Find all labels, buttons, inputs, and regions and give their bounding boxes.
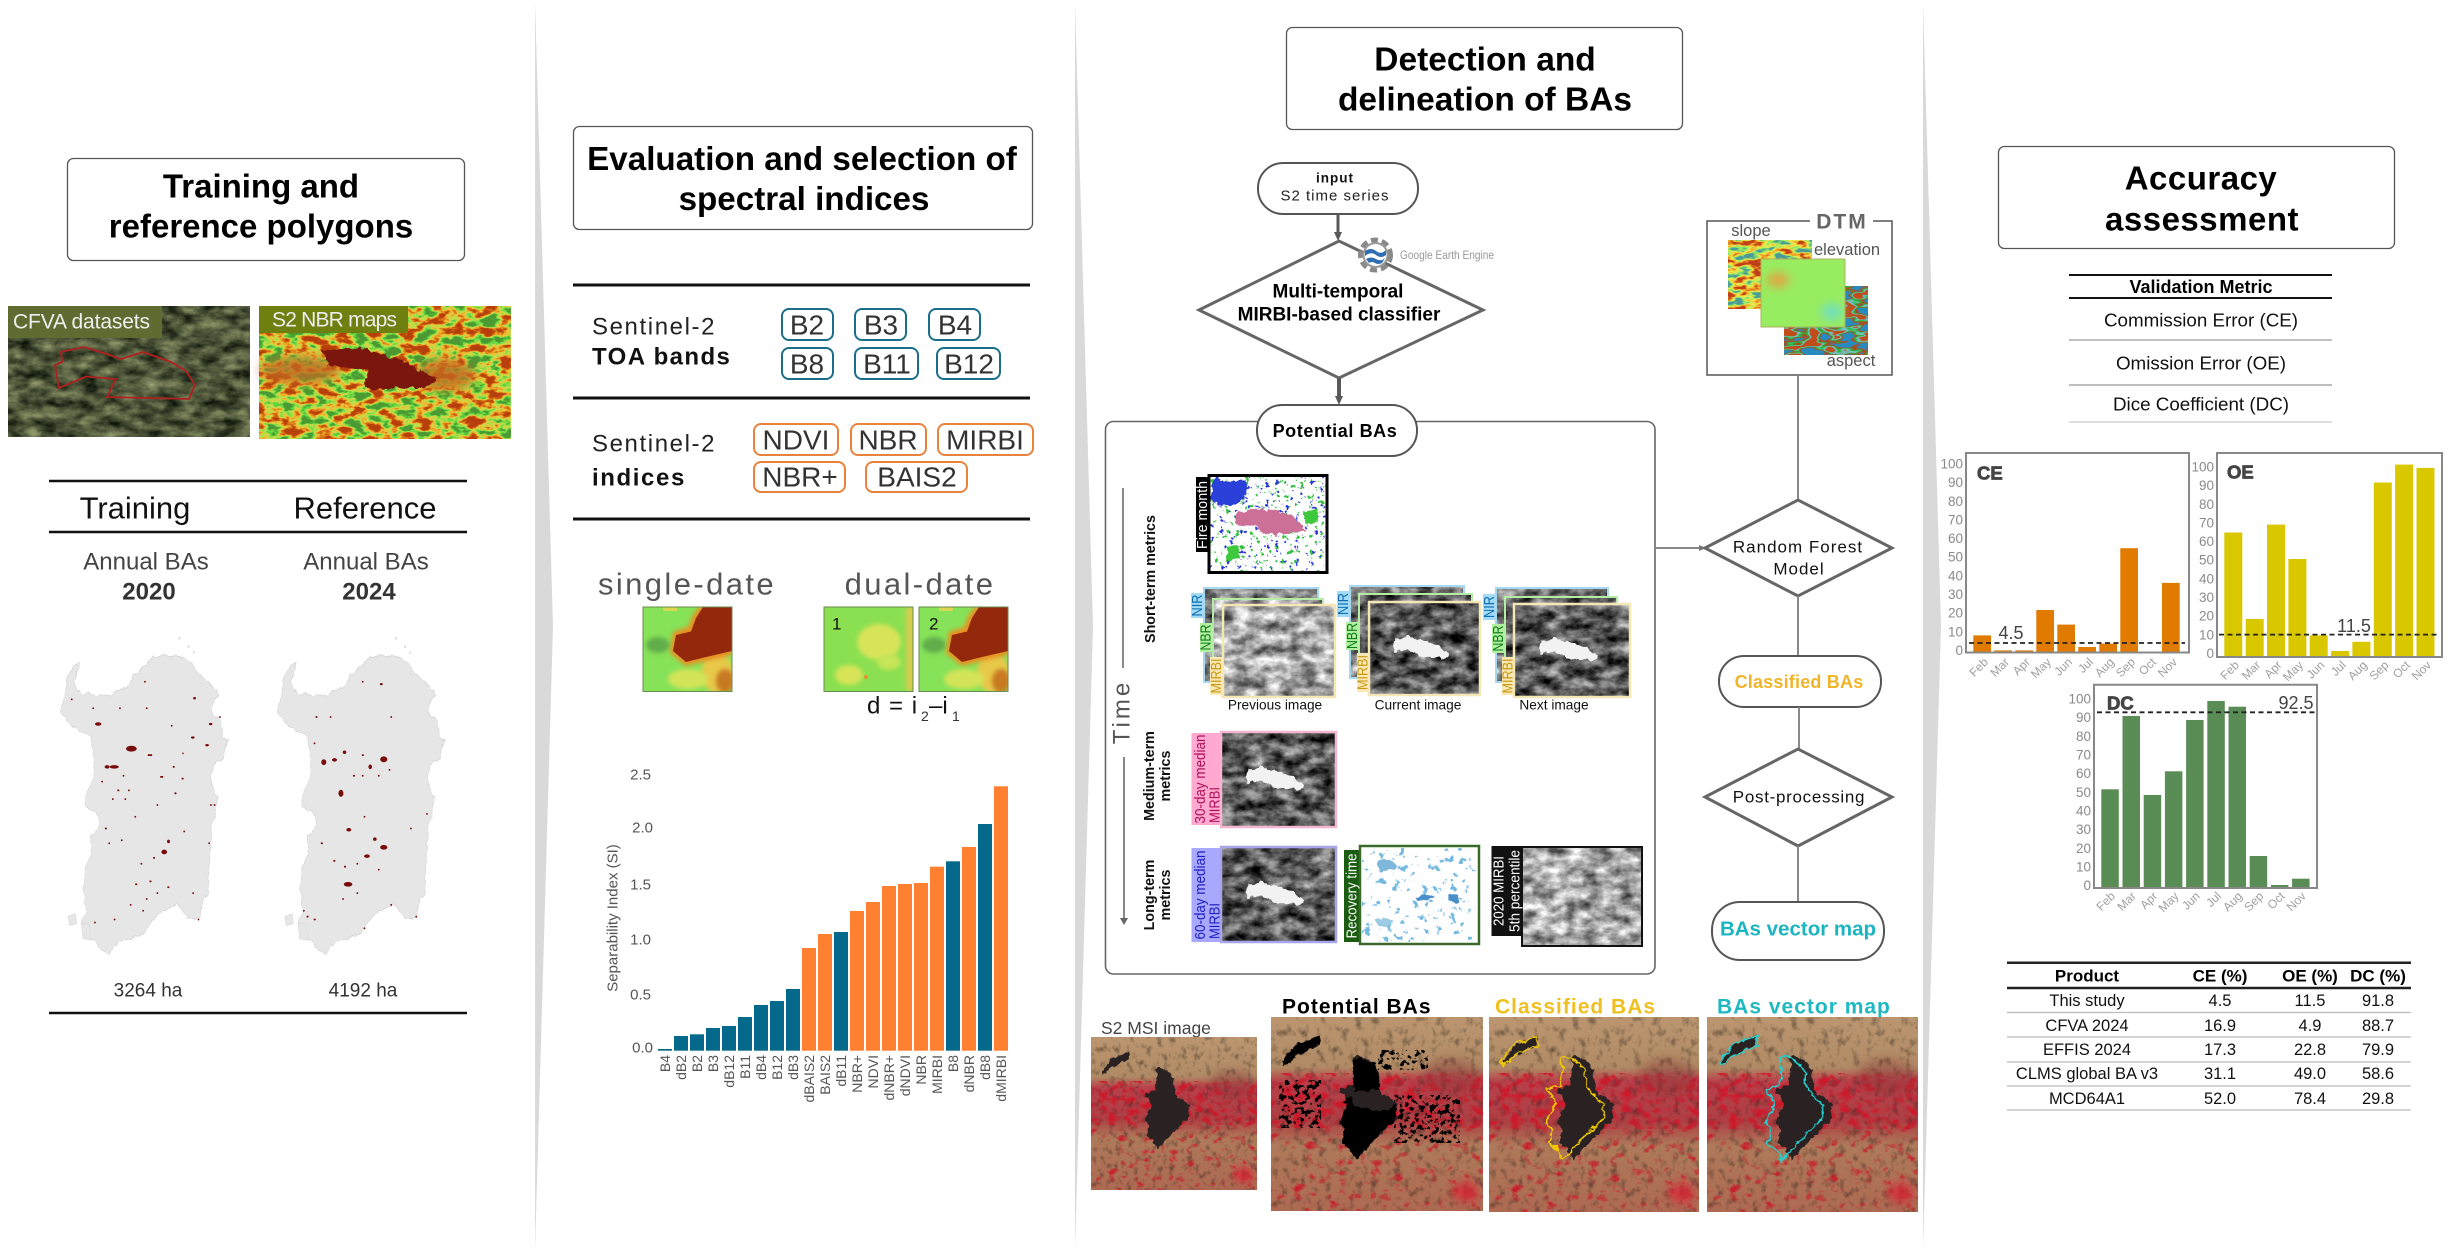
bar chart: OE: Jun [2304, 658, 2327, 682]
bar chart: DC: 100 [2068, 692, 2091, 706]
bar chart: CE: 50 [1948, 550, 1963, 565]
bar chart: OE: 60 [2199, 534, 2214, 549]
flow: BAs vector map [1712, 902, 1884, 960]
image stack: previous image: MIRBI [1208, 658, 1225, 694]
dual-date example: 1 [832, 614, 841, 634]
table: product comparison: Product [2055, 966, 2119, 986]
chips: spectral indices: MIRBI [946, 424, 1024, 456]
DTM inputs: slope [1731, 222, 1771, 240]
table: product comparison: OE (%) [2282, 966, 2338, 986]
image: 2020 MIRBI 5th percentile: 2020 MIRBI [1490, 856, 1508, 926]
image: fire month [1194, 476, 1327, 573]
image stack: next image: MIRBI [1500, 658, 1516, 694]
bar chart: separability index: dB3 [785, 1055, 801, 1080]
table: product comparison: 11.5 [2295, 992, 2325, 1010]
bar chart: CE: 80 [1948, 494, 1963, 509]
image: 30-day median MIRBI: 30-day median [1192, 734, 1209, 824]
arrow: time axis [1108, 488, 1136, 925]
bar chart: DC: Jul [2203, 889, 2224, 910]
decision: random forest model [1705, 500, 1892, 596]
bar chart: OE: 100 [2191, 460, 2214, 474]
table: product comparison: 49.0 [2294, 1065, 2326, 1083]
bar chart: DC: 70 [2076, 748, 2091, 762]
image: S2 NBR maps [259, 306, 511, 439]
heading: training and reference polygons [68, 158, 464, 260]
table: training and reference columns: 2020 [122, 578, 176, 606]
image: S2 MSI image [1091, 1018, 1257, 1190]
arrow: time axis: Time [1108, 680, 1136, 744]
dual-date example: d = i [867, 692, 918, 720]
text: Sentinel-2 TOA bands: TOA bands [592, 344, 731, 370]
DTM inputs: elevation [1814, 241, 1880, 259]
bar chart: DC: Jun [2179, 889, 2203, 913]
table: product comparison: 78.4 [2294, 1090, 2326, 1108]
bar chart: separability index: MIRBI [929, 1055, 945, 1094]
row labels: metric scales [1142, 515, 1174, 930]
arrow: model to classified BAs [1797, 596, 1799, 656]
chips: spectral indices: NBR [858, 424, 918, 456]
flow: classified BAs [1719, 656, 1881, 707]
decision: multi-temporal MIRBI-based classifier: MIRBI-based classifier [1238, 304, 1441, 326]
flow: potential BAs: Potential BAs [1273, 421, 1397, 441]
heading: detection and delineation: delineation of BAs [1338, 82, 1632, 118]
bar chart: CE: 0 [1955, 643, 1963, 658]
row labels: metric scales: metrics [1158, 870, 1174, 920]
bar chart: DC: 60 [2076, 766, 2091, 781]
heading: accuracy assessment [1998, 146, 2394, 248]
bar chart: separability index: B4 [657, 1055, 673, 1072]
bar chart: OE: Apr [2262, 658, 2285, 681]
bar chart: DC: 40 [2076, 804, 2091, 818]
image: CFVA datasets [8, 306, 250, 437]
icon: Google Earth Engine [1360, 240, 1494, 270]
bar chart: OE: Nov [2409, 658, 2434, 683]
table: product comparison: DC (%) [2350, 966, 2406, 986]
bar chart: CE: 20 [1948, 606, 1963, 621]
image stack: previous image: Previous image [1228, 698, 1322, 712]
image: 30-day median MIRBI [1192, 732, 1336, 827]
table: product comparison: EFFIS 2024 [2043, 1041, 2131, 1059]
bar chart: separability index: B11 [737, 1055, 753, 1079]
image stack: current image: NIR [1335, 593, 1352, 615]
table: training and reference columns: Training [80, 490, 190, 526]
bar chart: OE [2191, 453, 2442, 684]
table: validation metrics: Omission Error (OE) [2116, 352, 2286, 374]
text: Sentinel-2 indices: Sentinel-2 [592, 430, 716, 458]
arrow: DTM to random forest [1797, 375, 1799, 500]
image: classified BAs result: Classified BAs [1495, 996, 1656, 1018]
map: annual burned areas 2020 [61, 638, 228, 955]
chips: spectral bands [782, 309, 1000, 380]
table: product comparison: 16.9 [2204, 1017, 2236, 1035]
table: product comparison: 52.0 [2204, 1090, 2236, 1108]
table: training and reference columns: Annual BAs [83, 548, 209, 576]
image: S2 MSI image: S2 MSI image [1101, 1018, 1211, 1038]
chips: spectral bands: B11 [863, 348, 911, 380]
bar chart: CE: Nov [2155, 655, 2180, 680]
chips: spectral indices: NDVI [763, 424, 829, 456]
image: potential BAs result [1271, 996, 1483, 1211]
bar chart: DC: Sep [2241, 889, 2267, 914]
table: product comparison: 58.6 [2362, 1065, 2394, 1083]
bar chart: CE: Mar [1987, 655, 2012, 680]
bar chart: separability index: NDVI [865, 1055, 881, 1088]
bar chart: DC: 80 [2076, 729, 2091, 744]
bar chart: separability index: dNDVI [897, 1055, 913, 1096]
bar chart: DC: Nov [2284, 889, 2309, 914]
flow: input S2 time series [1258, 163, 1418, 214]
bar chart: separability index [604, 766, 1009, 1102]
bar chart: CE: Oct [2136, 655, 2159, 678]
table: product comparison: 4.9 [2299, 1017, 2321, 1035]
table: product comparison: CE (%) [2193, 966, 2247, 986]
image: fire month: Fire month [1194, 481, 1211, 549]
bar chart: DC: Feb [2093, 889, 2118, 914]
bar chart: CE: CE [1977, 462, 2003, 484]
text: Sentinel-2 TOA bands: Sentinel-2 [592, 314, 716, 340]
chips: spectral indices: BAIS2 [877, 462, 957, 492]
image: CFVA datasets: CFVA datasets [13, 310, 150, 334]
bar chart: OE: 80 [2199, 497, 2214, 512]
image: 60-day median MIRBI [1192, 847, 1336, 942]
table: training and reference columns [49, 481, 467, 1013]
row labels: metric scales: Long-term [1142, 860, 1158, 930]
bar chart: CE: Jul [2075, 655, 2096, 676]
bar chart: separability index: dMIRBI [993, 1055, 1009, 1102]
bar chart: separability index: B3 [705, 1055, 721, 1072]
bar chart: DC: 90 [2076, 710, 2091, 725]
table: validation metrics [2069, 275, 2332, 422]
bar chart: CE: 4.5 [1998, 623, 2024, 643]
chips: spectral bands: B2 [790, 310, 824, 340]
single-date example [598, 566, 776, 693]
bar chart: separability index: dNBR+ [881, 1055, 897, 1101]
bar chart: separability index: dB12 [721, 1055, 737, 1088]
bar chart: separability index: NBR+ [849, 1055, 865, 1093]
image: potential BAs result: Potential BAs [1282, 996, 1432, 1018]
heading: accuracy assessment: Accuracy [2125, 160, 2277, 196]
bar chart: separability index: B8 [945, 1055, 961, 1072]
chips: spectral indices: NBR+ [762, 462, 838, 492]
image: BAs vector map result: BAs vector map [1717, 996, 1891, 1018]
flow: classified BAs: Classified BAs [1735, 672, 1863, 692]
bar chart: CE: 100 [1940, 456, 1963, 472]
decision: post-processing [1705, 749, 1892, 846]
arrow: post-processing to vector map [1797, 846, 1799, 902]
decision: multi-temporal MIRBI-based classifier [1199, 241, 1483, 378]
bar chart: separability index: 0.5 [630, 986, 651, 1004]
image: 60-day median MIRBI: MIRBI [1206, 903, 1224, 939]
bar chart: separability index: dB4 [753, 1055, 769, 1080]
bar chart: OE: Aug [2345, 658, 2370, 683]
bar chart: separability index: BAIS2 [817, 1055, 833, 1095]
image stack: next image: Next image [1519, 698, 1589, 712]
bar chart: OE: 10 [2199, 627, 2214, 642]
table: product comparison: 4.5 [2209, 992, 2231, 1010]
table: product comparison: CFVA 2024 [2045, 1017, 2129, 1035]
arrow: classified to post-processing [1798, 707, 1800, 749]
panel: detection and delineation of BAs [1091, 28, 1918, 1212]
bar chart: separability index: 2.5 [630, 766, 651, 784]
heading: detection and delineation: Detection and [1374, 42, 1596, 78]
image: classified BAs result [1489, 996, 1699, 1212]
bar chart: separability index: 1.5 [630, 876, 651, 894]
image: BAs vector map result [1707, 996, 1918, 1212]
flow: input S2 time series: S2 time series [1280, 188, 1390, 204]
table: product comparison: 29.8 [2362, 1090, 2394, 1108]
bar chart: DC: 92.5 [2278, 693, 2314, 713]
bar chart: CE: Apr [2010, 655, 2033, 678]
image: 30-day median MIRBI: MIRBI [1206, 787, 1224, 823]
table: product comparison: This study [2049, 992, 2125, 1010]
image: 2020 MIRBI 5th percentile: 5th percentile [1506, 850, 1524, 932]
table: product comparison: MCD64A1 [2049, 1090, 2125, 1108]
image stack: current image: Current image [1375, 698, 1461, 712]
DTM inputs: DTM [1816, 210, 1868, 234]
heading: accuracy assessment: assessment [2105, 200, 2299, 238]
row labels: metric scales: Short-term metrics [1143, 515, 1159, 643]
bar chart: CE: 70 [1948, 512, 1963, 527]
metrics panel [1106, 405, 1655, 974]
bar chart: DC: Aug [2220, 889, 2245, 914]
table: validation metrics: Validation Metric [2129, 277, 2273, 297]
bar chart: DC: 20 [2076, 841, 2091, 856]
bar chart: DC: Apr [2137, 889, 2160, 912]
bar chart: CE: 40 [1948, 568, 1963, 583]
decision: random forest model: Random Forest [1733, 538, 1863, 556]
table: product comparison: 88.7 [2362, 1017, 2394, 1035]
table: product comparison: 79.9 [2362, 1041, 2394, 1059]
bar chart: DC: May [2156, 889, 2182, 915]
bar chart: CE: Feb [1966, 655, 1991, 680]
decision: multi-temporal MIRBI-based classifier: Multi-temporal [1273, 282, 1403, 302]
bar chart: separability index: dBAIS2 [801, 1055, 817, 1102]
bar chart: CE: 60 [1948, 531, 1963, 546]
bar chart: separability index: B12 [769, 1055, 785, 1080]
bar chart: CE: Aug [2092, 655, 2117, 680]
bar chart: OE: 0 [2206, 646, 2214, 661]
heading: training and reference polygons: Training and [163, 168, 359, 204]
panel separator arrows [535, 2, 1941, 1250]
bar chart: OE: Jul [2328, 658, 2349, 679]
bar chart: DC: Mar [2114, 889, 2139, 914]
bar chart: OE: 40 [2199, 571, 2214, 586]
DTM inputs: aspect [1827, 352, 1876, 370]
section rules [573, 285, 1030, 519]
bar chart: OE: 50 [2199, 553, 2214, 568]
bar chart: DC: 30 [2076, 822, 2091, 837]
icon: Google Earth Engine: Google Earth Engine [1400, 248, 1494, 262]
table: training and reference columns: 3264 ha [114, 980, 183, 1002]
bar chart: CE: 30 [1948, 587, 1963, 602]
bar chart: OE: 70 [2199, 515, 2214, 530]
bar chart: OE: May [2280, 658, 2306, 684]
bar chart: separability index: Separability Index (SI) [604, 844, 622, 992]
heading: evaluation and selection: Evaluation and selection of [587, 141, 1018, 178]
flow: input S2 time series: input [1316, 170, 1354, 186]
bar chart: OE: 11.5 [2337, 616, 2371, 636]
panel: training and reference polygons [8, 158, 511, 1013]
bar chart: OE: OE [2227, 462, 2254, 482]
decision: post-processing: Post-processing [1733, 788, 1865, 806]
image stack: current image [1335, 586, 1480, 712]
table: product comparison: 22.8 [2294, 1041, 2326, 1059]
dual-date example: 2 [929, 614, 938, 634]
bar chart: OE: 90 [2199, 478, 2214, 493]
table: product comparison: 31.1 [2204, 1065, 2236, 1083]
panel: evaluation and selection of spectral indices [573, 126, 1033, 1102]
bar chart: DC: 0 [2083, 878, 2091, 893]
dual-date example: 1 [952, 708, 960, 724]
single-date example: single-date [598, 566, 776, 602]
chips: spectral bands: B8 [790, 348, 824, 380]
bar chart: separability index: dB8 [977, 1055, 993, 1080]
image: 2020 MIRBI 5th percentile [1490, 846, 1642, 946]
table: training and reference columns: 2024 [342, 578, 396, 606]
image: S2 NBR maps: S2 NBR maps [272, 308, 397, 332]
flow: BAs vector map: BAs vector map [1720, 918, 1876, 940]
bar chart: CE: May [2028, 655, 2054, 681]
bar chart: CE: Jun [2051, 655, 2075, 679]
bar chart: OE: 20 [2199, 609, 2214, 624]
bar chart: DC: Oct [2264, 889, 2288, 912]
bar chart: DC: DC [2107, 692, 2134, 714]
bar chart: OE: Oct [2390, 658, 2413, 681]
table: product comparison [2007, 963, 2411, 1110]
bar chart: separability index: dB2 [673, 1055, 689, 1080]
image stack: next image: NBR [1490, 625, 1507, 652]
bar chart: CE: 10 [1948, 624, 1963, 639]
image stack: previous image [1189, 588, 1335, 712]
panel: accuracy assessment [1940, 146, 2442, 1110]
image stack: current image: NBR [1344, 623, 1361, 649]
image: recovery time: Recovery time [1344, 854, 1360, 938]
heading: evaluation and selection [574, 126, 1032, 230]
bar chart: OE: 30 [2199, 590, 2214, 605]
DTM inputs [1707, 210, 1892, 375]
row labels: metric scales: metrics [1158, 751, 1174, 801]
dual-date example: 2 [921, 708, 929, 724]
bar chart: separability index: 1.0 [630, 932, 651, 948]
table: product comparison: 91.8 [2362, 992, 2394, 1010]
bar chart: DC: 10 [2076, 860, 2091, 874]
bar chart: separability index: 0.0 [632, 1040, 653, 1056]
table: product comparison: 17.3 [2204, 1041, 2236, 1059]
arrow: metrics to random forest [1655, 545, 1706, 551]
map: annual burned areas 2024 [277, 638, 445, 955]
table: product comparison: CLMS global BA v3 [2016, 1065, 2158, 1083]
image stack: current image: MIRBI [1354, 655, 1372, 690]
image stack: previous image: NBR [1198, 624, 1214, 650]
table: training and reference columns: Reference [293, 490, 437, 526]
chips: spectral indices [754, 424, 1033, 492]
dual-date example: dual-date [845, 566, 995, 602]
image stack: next image [1481, 588, 1630, 712]
table: validation metrics: Commission Error (CE) [2104, 310, 2298, 330]
decision: random forest model: Model [1773, 560, 1825, 578]
bar chart: OE: Feb [2217, 658, 2242, 683]
bar chart: CE [1940, 453, 2189, 681]
bar chart: OE: Sep [2366, 658, 2392, 683]
chips: spectral bands: B3 [864, 310, 898, 340]
heading: evaluation and selection: spectral indices [679, 181, 929, 218]
text: Sentinel-2 TOA bands [592, 314, 731, 370]
bar chart: separability index: NBR [913, 1055, 929, 1085]
text: Sentinel-2 indices: indices [592, 464, 686, 492]
heading: detection and delineation [1286, 28, 1682, 130]
bar chart: CE: Sep [2113, 655, 2138, 680]
table: training and reference columns: 4192 ha [329, 980, 398, 1002]
bar chart: DC: 50 [2076, 785, 2091, 800]
bar chart: separability index: dNBR [961, 1055, 977, 1092]
chips: spectral bands: B4 [938, 310, 972, 340]
bar chart: separability index: dB11 [833, 1055, 849, 1087]
table: validation metrics: Dice Coefficient (DC) [2113, 394, 2289, 414]
heading: training and reference polygons: reference polygons [109, 208, 413, 244]
dual-date example: –i [929, 692, 948, 720]
bar chart: OE: Mar [2239, 658, 2263, 683]
arrow: classifier to potential BAs [1335, 378, 1343, 405]
bar chart: DC [2068, 685, 2317, 915]
bar chart: separability index: 2.0 [632, 820, 653, 836]
row labels: metric scales: Medium-term [1142, 731, 1158, 821]
chips: spectral bands: B12 [944, 348, 994, 380]
bar chart: CE: 90 [1948, 475, 1963, 490]
image stack: previous image: NIR [1189, 594, 1206, 616]
image: 60-day median MIRBI: 60-day median [1192, 850, 1209, 940]
bar chart: separability index: B2 [689, 1055, 705, 1072]
image: recovery time [1344, 846, 1479, 944]
dual-date example [824, 566, 1010, 724]
table: training and reference columns: Annual BAs [303, 548, 429, 576]
text: Sentinel-2 indices [592, 430, 716, 492]
arrow: input to classifier [1334, 214, 1342, 241]
flow: potential BAs [1257, 405, 1417, 456]
image stack: next image: NIR [1481, 596, 1498, 618]
